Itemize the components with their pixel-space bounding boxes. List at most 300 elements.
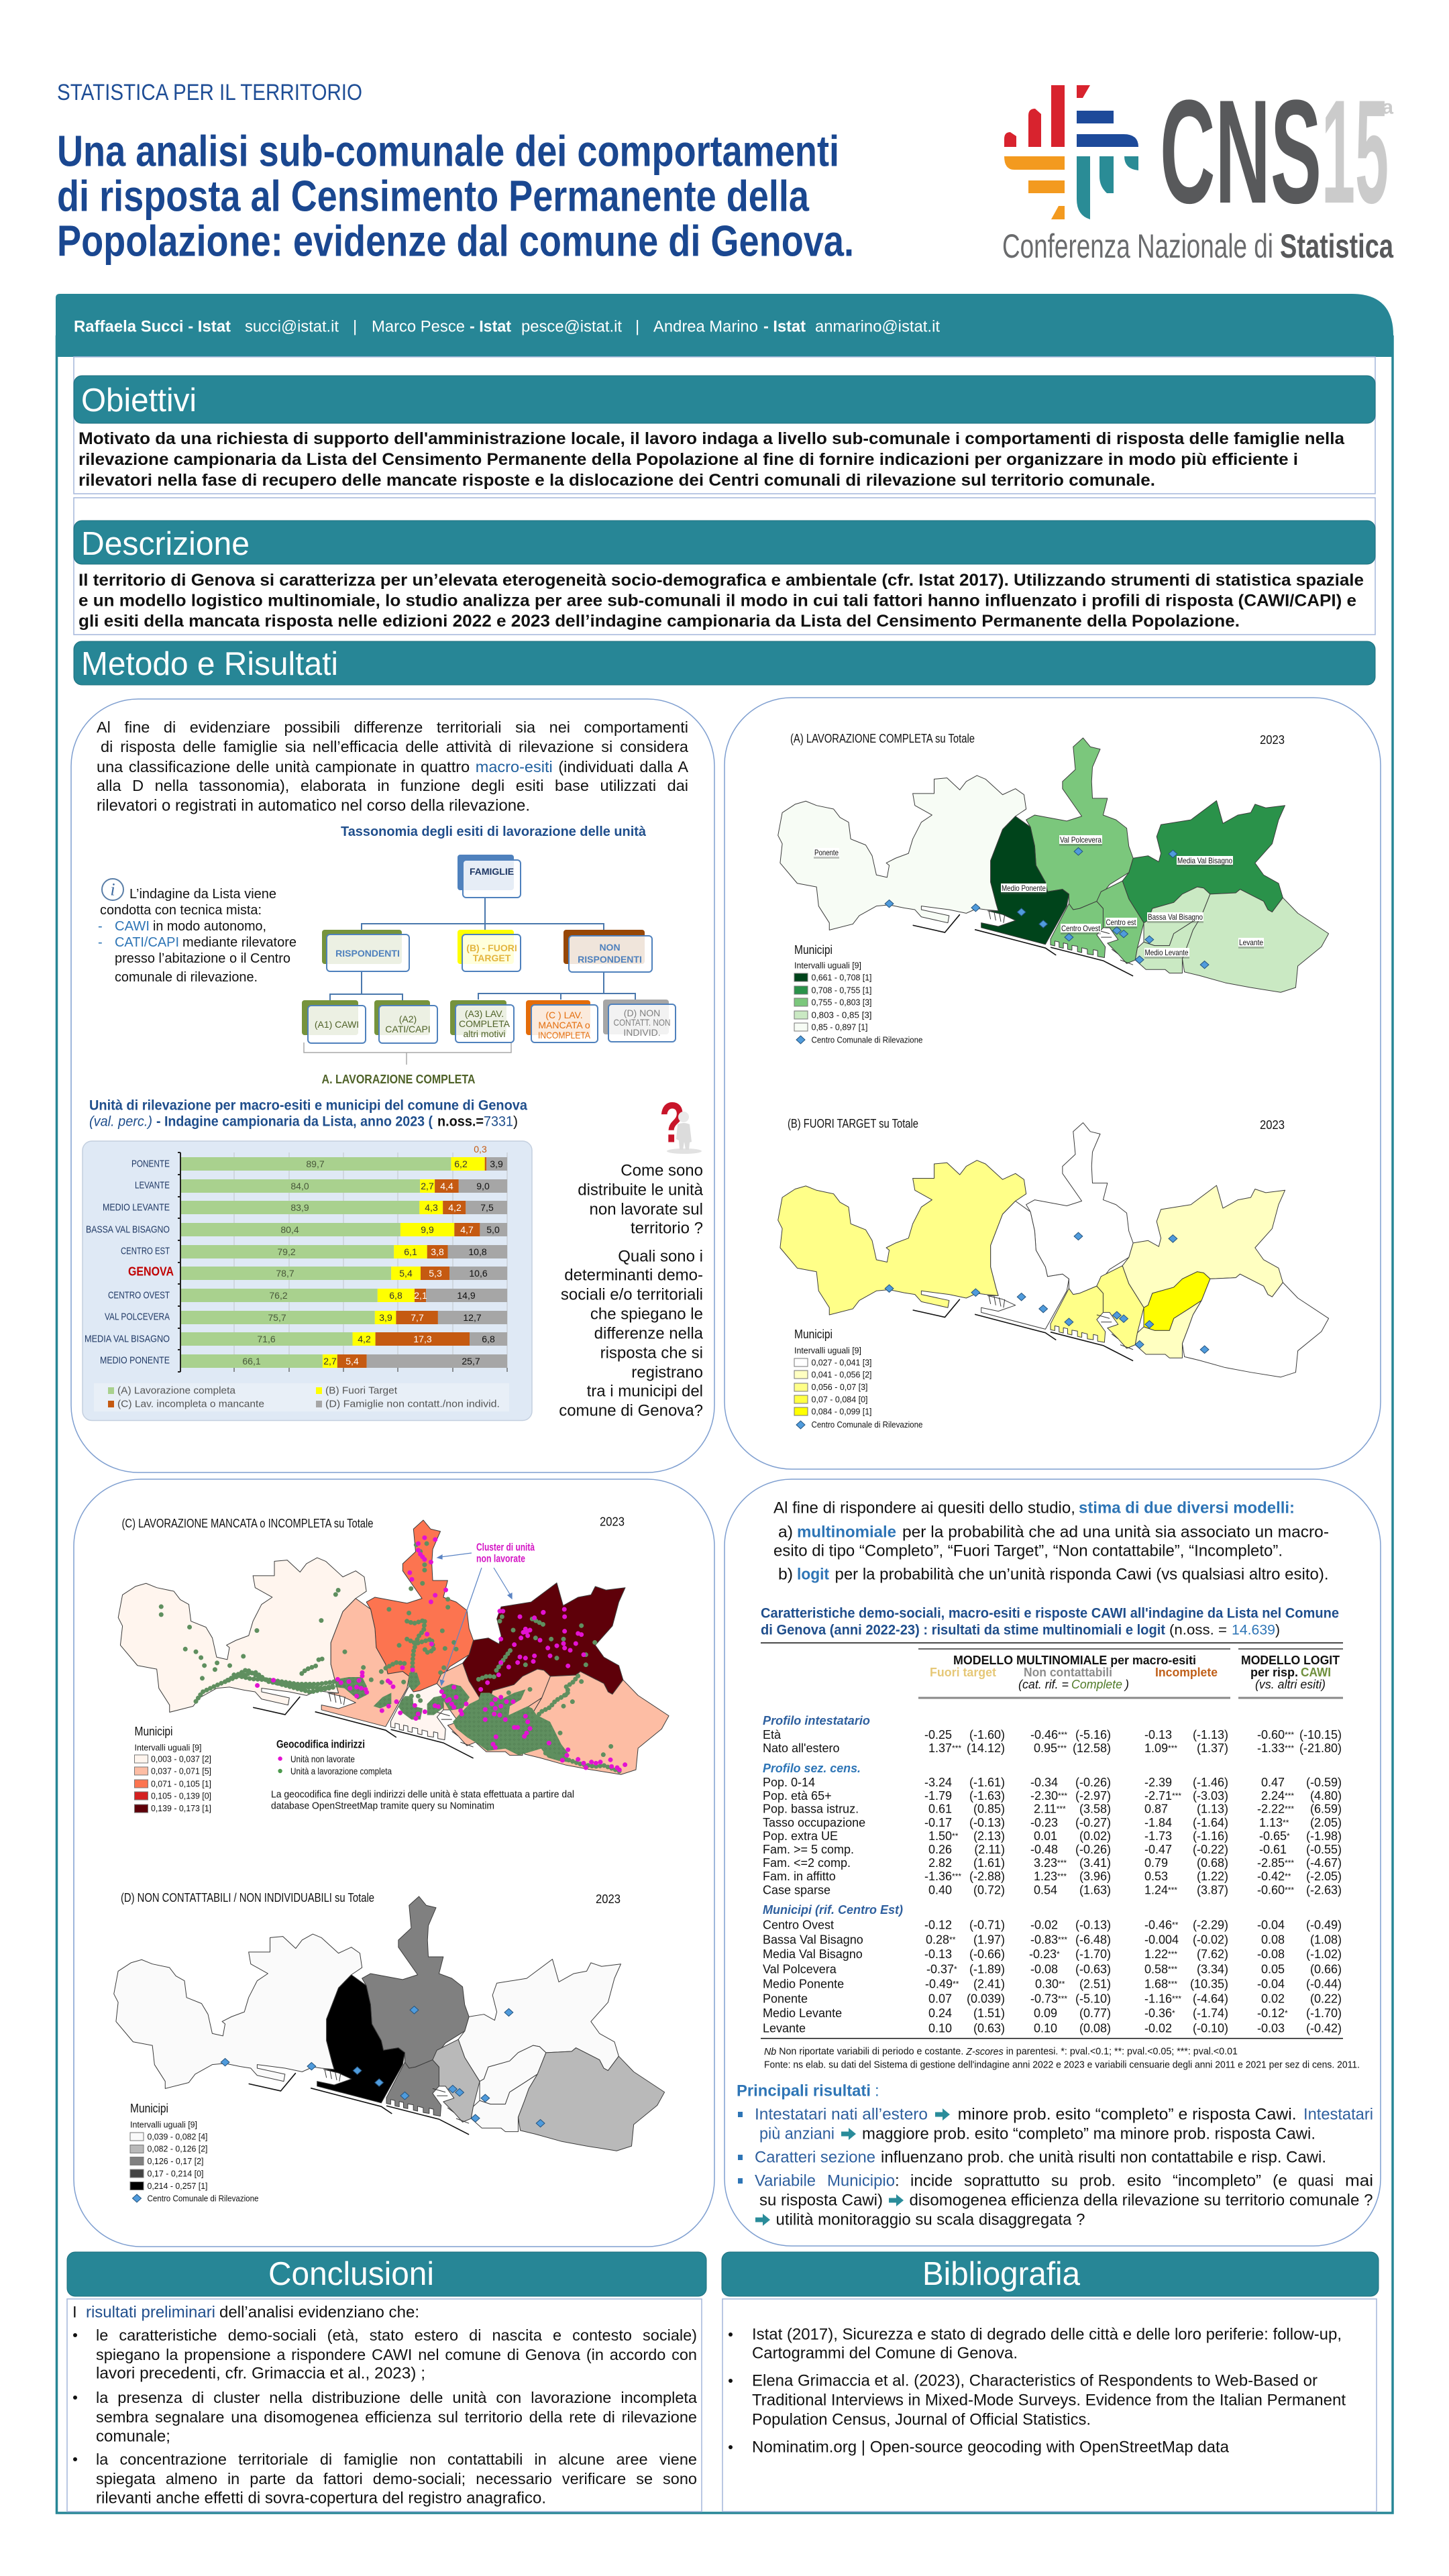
table rows: (2.51): [1079, 1978, 1111, 1991]
table rows: -0.12: [924, 1919, 952, 1932]
value labels: 4,2: [448, 1202, 462, 1213]
map B legend: [794, 1328, 923, 1430]
table rows: (-1.16): [1193, 1829, 1228, 1843]
value labels: 5,3: [429, 1268, 442, 1279]
table rows: -0.65*: [1259, 1829, 1290, 1843]
node: D: [603, 1000, 676, 1042]
category labels: VAL POLCEVERA: [105, 1311, 170, 1323]
logo: CNS 15a Conferenza Nazionale di Statistica: a: [1382, 97, 1393, 118]
value labels: 5,4: [399, 1268, 413, 1279]
category labels: BASSA VAL BISAGNO: [86, 1224, 170, 1236]
heading: tabella stime: (n.oss. =: [1169, 1622, 1227, 1638]
map D legend: 0,039 - 0,082 [4]: [148, 2132, 208, 2141]
node: C: (C ) LAV.: [545, 1010, 583, 1020]
text: modelli stimati: a): [778, 1523, 793, 1542]
table rows: (0.66): [1310, 1963, 1342, 1976]
table rows: (-5.16): [1075, 1728, 1111, 1741]
map A labels: Centro est: [1106, 918, 1136, 927]
table rows: -0.08: [1257, 1947, 1285, 1961]
table header: MODELLO MULTINOMIALE per macro-esiti: [953, 1654, 1196, 1667]
value labels: 7,5: [480, 1202, 494, 1213]
table rows: (7.62): [1197, 1947, 1228, 1961]
table rows: Centro Ovest: [763, 1919, 834, 1932]
map D legend: 0,17 - 0,214 [0]: [148, 2168, 204, 2179]
category labels: GENOVA: [128, 1265, 174, 1279]
value labels: 6,1: [404, 1246, 417, 1257]
map D legend: 0,214 - 0,257 [1]: [148, 2181, 208, 2191]
value labels: 14,9: [457, 1290, 476, 1301]
text: conclusioni: risultati preliminari: [86, 2304, 215, 2321]
table rows: -1.16***: [1144, 1992, 1181, 2006]
map A year: 2023: [1260, 733, 1285, 747]
table rows: -0.02: [1144, 2022, 1172, 2035]
table rows: 1.23***: [1034, 1870, 1067, 1883]
table rows: (-0.49): [1306, 1919, 1342, 1932]
text: introduzione metodo: rilevatori o registrati in automatico nel corso della rilevazione.: [97, 797, 530, 814]
map C legend: 0,139 - 0,173 [1]: [151, 1803, 211, 1813]
table rows: (12.58): [1073, 1741, 1111, 1755]
table rows: -0.37*: [926, 1963, 957, 1976]
table rows: 1.37***: [928, 1741, 961, 1755]
text: riferimenti: [729, 2325, 1346, 2457]
category labels: PONENTE: [131, 1158, 170, 1170]
table rows: Tasso occupazione: [763, 1816, 865, 1829]
chart legend: (C) Lav. incompleta o mancante: [117, 1398, 264, 1410]
table rows: (0.02): [1079, 1829, 1111, 1843]
map A legend: 0,708 - 0,755 [1]: [812, 985, 872, 996]
text: domande di ricerca: distribuite le unità: [578, 1181, 704, 1199]
list: principali risultati: più anziani: [759, 2125, 835, 2143]
table rows: -2.85***: [1257, 1856, 1294, 1870]
table rows: Case sparse: [763, 1884, 830, 1897]
map D year: 2023: [596, 1892, 621, 1906]
map B legend: 0,056 - 0,07 [3]: [812, 1382, 868, 1392]
map C legend: 0,037 - 0,071 [5]: [151, 1766, 211, 1776]
heading: Conclusioni: [67, 2252, 706, 2296]
callout: indagine a tecnica mista: mediante rilevatore: [182, 935, 297, 950]
table rows: (-0.66): [969, 1947, 1005, 1961]
value labels: 89,7: [306, 1159, 325, 1169]
table rows: (-1.02): [1306, 1947, 1342, 1961]
authors band: Marco Pesce: [372, 318, 465, 335]
table rows: 0.28**: [926, 1933, 956, 1947]
text: domande di ricerca: registrano: [631, 1363, 703, 1382]
table rows: -0.23: [1030, 1816, 1058, 1829]
table rows: (-0.13): [1075, 1919, 1111, 1932]
heading: Metodo e Risultati: Metodo e Risultati: [81, 646, 338, 682]
map A labels: [814, 835, 1264, 959]
text: obiettivi: [78, 429, 1345, 490]
table rows: 0.02: [1261, 1992, 1285, 2006]
table rows: -0.08: [1030, 1963, 1058, 1976]
node: rispondenti: RISPONDENTI: [335, 948, 400, 959]
node: A3: (A3) LAV.: [465, 1008, 504, 1019]
text: riferimenti: Population Census, Journal of Official Statistics.: [752, 2411, 1091, 2428]
text: domande di ricerca: Quali sono i: [618, 1248, 703, 1265]
heading: principali risultati: :: [875, 2082, 879, 2100]
text: domande di ricerca: che spiegano le: [590, 1305, 703, 1323]
table rows: -0.25: [924, 1728, 952, 1741]
table rows: (-1.89): [969, 1963, 1005, 1976]
callout: indagine a tecnica mista: in modo autonomo,: [153, 919, 266, 934]
heading: Obiettivi: Obiettivi: [81, 382, 197, 419]
heading: principali risultati: Principali risultati: [737, 2082, 871, 2100]
text: domande di ricerca: non lavorate sul: [590, 1201, 703, 1218]
map D legend: 0,126 - 0,17 [2]: [148, 2156, 204, 2166]
table rows: -0.03: [1257, 2022, 1285, 2035]
list: principali risultati: su: [1051, 2172, 1068, 2190]
table rows: Bassa Val Bisagno: [763, 1933, 863, 1947]
table header: CAWI: [1301, 1666, 1331, 1679]
table rows: -0.46**: [1144, 1919, 1179, 1932]
text: modelli stimati: esito di tipo “Completo”, “Fuori Target”, “Non contattabile”, “Incompleto”.: [773, 1542, 1283, 1560]
map A title: (A) LAVORAZIONE COMPLETA su Totale: [790, 732, 975, 745]
table rows: (1.13): [1197, 1802, 1228, 1815]
table header: Complete: [1071, 1678, 1122, 1691]
table rows: (1.37): [1197, 1741, 1228, 1755]
list: principali risultati: Municipio: [827, 2172, 895, 2190]
map C legend: 0,105 - 0,139 [0]: [151, 1791, 211, 1801]
heading: tabella stime: di Genova (anni 2022-23) : risultati da stime multinomiali e logit: [761, 1622, 1165, 1638]
value labels: 9,0: [476, 1181, 490, 1191]
authors band: - Istat: [470, 318, 511, 335]
category labels: LEVANTE: [135, 1179, 170, 1191]
chart: tassonomia: [302, 855, 676, 1086]
text: descrizione: e un modello logistico multinomiale, lo studio analizza per aree sub-comunali il modo in cui tali fattori hanno influenzato i profili di risposta (CAWI/CAPI) e: [78, 592, 1356, 610]
map A legend: Centro Comunale di Rilevazione: [812, 1034, 923, 1045]
table rows: (-0.22): [1193, 1843, 1228, 1856]
table rows: 1.68***: [1144, 1978, 1177, 1991]
text: modelli stimati: multinomiale: [797, 1523, 896, 1542]
table rows: -0.47: [1144, 1843, 1172, 1856]
table rows: (1.63): [1079, 1884, 1111, 1897]
text: modelli stimati: [773, 1499, 1329, 1583]
heading: Obiettivi: [74, 376, 1375, 423]
text: domande di ricerca: Come sono: [621, 1162, 703, 1179]
icon: arrow: [755, 2214, 770, 2226]
table rows: (-2.97): [1075, 1789, 1111, 1803]
table rows: (-1.13): [1193, 1728, 1228, 1741]
list: principali risultati: Variabile: [755, 2172, 816, 2190]
table rows: (-0.26): [1075, 1776, 1111, 1789]
map B legend: Centro Comunale di Rilevazione: [812, 1419, 923, 1430]
value labels: 12,7: [463, 1312, 482, 1323]
table rows: (-1.70): [1075, 1947, 1111, 1961]
table rows: 1.13**: [1259, 1816, 1289, 1829]
table rows: (6.59): [1310, 1802, 1342, 1815]
value labels: 4,4: [440, 1181, 453, 1191]
table rows: 1.22***: [1144, 1947, 1177, 1961]
table rows: [763, 1714, 1342, 2035]
table header: Fuori target: [930, 1666, 996, 1679]
text: conclusioni: I: [72, 2304, 77, 2321]
table rows: 0.09: [1034, 2006, 1057, 2020]
table rows: Pop. bassa istruz.: [763, 1802, 859, 1815]
text: domande di ricerca: determinanti demo-: [564, 1267, 703, 1284]
value labels: 2,7: [421, 1181, 434, 1191]
heading: tabella stime: Caratteristiche demo-sociali, macro-esiti e risposte CAWI all'indagine da Lista nel Comune: [761, 1606, 1339, 1621]
authors band: succi@istat.it: [245, 318, 339, 335]
map C legend: [134, 1725, 211, 1813]
table rows: -0.13: [1144, 1728, 1172, 1741]
node: non rispondenti: NON: [599, 942, 621, 953]
value labels: 3,9: [379, 1312, 392, 1323]
table rows: Pop. età 65+: [763, 1789, 832, 1803]
list: principali risultati: mai: [1345, 2172, 1373, 2190]
list: principali risultati: quasi: [1298, 2172, 1334, 2190]
value labels: 66,1: [242, 1356, 261, 1366]
value labels: 6,8: [389, 1290, 402, 1301]
table rows: 2.11***: [1034, 1802, 1066, 1815]
category labels: CENTRO EST: [121, 1245, 170, 1257]
value labels: [242, 1144, 503, 1366]
node: D: INDIVID.: [623, 1027, 661, 1038]
table rows: -0.73***: [1030, 1992, 1067, 2006]
table rows: -0.34: [1030, 1776, 1058, 1789]
panel: descrizione: [74, 498, 1375, 635]
table rows: 0.07: [928, 1992, 952, 2006]
text: riferimenti: Traditional Interviews in Mixed-Mode Surveys. Evidence from the Italian Permanent: [752, 2391, 1346, 2410]
list: principali risultati: su risposta Cawi): [759, 2191, 883, 2210]
chart legend: (D) Famiglie non contatt./non individ.: [325, 1398, 500, 1410]
map A labels: Media Val Bisagno: [1177, 856, 1232, 865]
list: principali risultati: [738, 2105, 1373, 2229]
heading: grafico unità per macro-esiti: n.oss.=: [437, 1114, 484, 1130]
panel: conclusioni: [67, 2252, 706, 2512]
heading: Descrizione: Descrizione: [81, 526, 250, 562]
callout: indagine a tecnica mista: CAWI: [115, 919, 150, 934]
map A labels: Medio Levante: [1144, 948, 1189, 957]
authors band: |: [353, 318, 357, 335]
authors band: Andrea Marino: [653, 318, 758, 335]
table rows: Medio Ponente: [763, 1978, 844, 1991]
table rows: (14.12): [967, 1741, 1005, 1755]
table rows: 0.54: [1034, 1884, 1057, 1897]
text: conclusioni: [72, 2304, 697, 2508]
table rows: (-0.63): [1075, 1963, 1111, 1976]
map A legend: 0,803 - 0,85 [3]: [812, 1010, 872, 1020]
map A labels: Val Polcevera: [1060, 835, 1102, 845]
table rows: (1.22): [1197, 1870, 1228, 1883]
map A legend: 0,755 - 0,803 [3]: [812, 997, 872, 1008]
table rows: 0.26: [928, 1843, 952, 1856]
list: principali risultati: utilità monitoraggio su scala disaggregata ?: [775, 2211, 1085, 2229]
table rows: (-1.60): [969, 1728, 1005, 1741]
table rows: Profilo intestatario: [763, 1714, 870, 1727]
table rows: Pop. 0-14: [763, 1776, 815, 1789]
text: modelli stimati: stima di due diversi modelli:: [1079, 1499, 1295, 1517]
table rows: (0.63): [973, 2022, 1005, 2035]
table rows: Nato all'estero: [763, 1741, 840, 1755]
geocoding legend: Geocodifica indirizzi: [276, 1737, 365, 1751]
table rows: (-1.64): [1193, 1816, 1228, 1829]
heading: grafico unità per macro-esiti: 7331: [484, 1114, 513, 1130]
table rows: -0.60***: [1257, 1884, 1294, 1897]
table rows: (-0.26): [1075, 1843, 1111, 1856]
value labels: 75,7: [268, 1312, 286, 1323]
text: riferimenti: Cartogrammi del Comune di Genova.: [752, 2344, 1018, 2363]
table rows: (-0.27): [1075, 1816, 1111, 1829]
heading: Bibliografia: [722, 2252, 1379, 2296]
map B title: (B) FUORI TARGET su Totale: [788, 1117, 918, 1130]
table header: ): [1124, 1678, 1129, 1691]
panel: metodo, tassonomia e grafico: [67, 698, 1381, 2512]
node: C: [526, 1000, 598, 1042]
table rows: Profilo sez. cens.: [763, 1762, 861, 1775]
table rows: 0.87: [1144, 1802, 1168, 1815]
value labels: 2,1: [414, 1290, 427, 1301]
table rows: 0.58***: [1144, 1963, 1177, 1976]
table rows: -0.36*: [1144, 2006, 1175, 2020]
table rows: (-6.48): [1075, 1933, 1111, 1947]
map D legend: [130, 2102, 259, 2203]
text: introduzione metodo: [97, 718, 688, 814]
table rows: -0.60***: [1257, 1728, 1294, 1741]
label: lavorazione completa: A. LAVORAZIONE COMPLETA: [322, 1073, 475, 1086]
table rows: 1.09***: [1144, 1741, 1177, 1755]
map A: lavorazione completa: [778, 738, 1329, 992]
table rows: -3.24: [924, 1776, 952, 1789]
table rows: (0.039): [967, 1992, 1005, 2006]
callout: cluster di unità non lavorate: non lavorate: [476, 1554, 525, 1564]
table rows: (2.11): [974, 1843, 1005, 1856]
map A legend: 0,85 - 0,897 [1]: [812, 1022, 868, 1032]
text: modelli stimati: per la probabilità che un’unità risponda Cawi (vs qualsiasi altro esito).: [835, 1566, 1328, 1583]
heading: tabella stime: 14.639: [1232, 1622, 1275, 1638]
map D legend: 0,082 - 0,126 [2]: [148, 2144, 208, 2153]
table rows: 0.05: [1261, 1963, 1285, 1976]
table rows: (3.58): [1079, 1802, 1111, 1815]
callout: indagine a tecnica mista: [98, 879, 297, 985]
node: A2: [374, 1000, 437, 1043]
table rows: (-0.55): [1306, 1843, 1342, 1856]
text: riferimenti: Nominatim.org | Open-source geocoding with OpenStreetMap data: [752, 2438, 1230, 2457]
list: principali risultati: maggiore prob. esito “completo” ma minore prob. risposta Cawi.: [862, 2125, 1316, 2143]
panel: obiettivi: [74, 357, 1375, 494]
list: principali risultati: Caratteri sezione: [755, 2148, 875, 2167]
table rows: -0.04: [1257, 1919, 1285, 1932]
panel: mappe A e B: [724, 698, 1381, 1469]
table rows: -0.13: [924, 1947, 952, 1961]
table rows: (10.35): [1190, 1978, 1228, 1991]
table rows: -1.73: [1144, 1829, 1172, 1843]
value labels: 76,2: [269, 1290, 288, 1301]
text: descrizione: gli esiti della mancata risposta nelle edizioni 2022 e 2023 dell’indagine campionaria da Lista del Censimento Permanente della Popolazione.: [78, 612, 1240, 631]
map C: geocoded dots east cluster: [335, 1611, 625, 1772]
table rows: -2.39: [1144, 1776, 1172, 1789]
table rows: 0.47: [1261, 1776, 1285, 1789]
map C: geocoded dots west and north: [161, 1538, 564, 1701]
note: geocodifica: database OpenStreetMap tramite query su Nominatim: [271, 1801, 494, 1811]
bars: [180, 1157, 507, 1368]
panel: modelli e risultati: [724, 1479, 1381, 2246]
table rows: (-1.74): [1193, 2006, 1228, 2020]
table rows: (-10.15): [1299, 1728, 1342, 1741]
title: di risposta al Censimento Permanente della: [57, 172, 810, 220]
map A legend: Municipi: [794, 943, 833, 957]
table rows: (-1.98): [1306, 1829, 1342, 1843]
icon: arrow: [841, 2128, 856, 2140]
title: [57, 126, 854, 266]
list: principali risultati: esito: [1127, 2172, 1161, 2190]
text: descrizione: [78, 571, 1364, 631]
map B legend: 0,07 - 0,084 [0]: [812, 1394, 868, 1405]
table rows: 0.95***: [1034, 1741, 1067, 1755]
table rows: Medio Levante: [763, 2006, 842, 2020]
table rows: (0.85): [973, 1802, 1005, 1815]
table rows: 0.61: [928, 1802, 952, 1815]
map C legend: Municipi: [134, 1725, 173, 1738]
authors band: - Istat: [763, 318, 806, 335]
table rows: (-2.05): [1306, 1870, 1342, 1883]
list: principali risultati: incide: [910, 2172, 953, 2190]
table rows: 0.30**: [1035, 1978, 1065, 1991]
heading: grafico unità per macro-esiti: - Indagine campionaria da Lista, anno 2023 (: [156, 1114, 433, 1130]
table rows: 0.08: [1261, 1933, 1285, 1947]
table rows: -2.71***: [1144, 1789, 1181, 1803]
map A labels: Ponente: [814, 848, 839, 857]
callout: cluster di unità non lavorate: Cluster di unità: [476, 1542, 535, 1554]
text: domande di ricerca: differenze nella: [594, 1324, 704, 1343]
map C: lavorazione mancata: [118, 1520, 669, 1774]
geocoding legend: Unità a lavorazione completa: [290, 1766, 392, 1776]
table rows: -1.79: [924, 1789, 952, 1803]
map A labels: Levante: [1239, 938, 1263, 947]
table rows: (-4.67): [1306, 1856, 1342, 1870]
poster frame: [56, 335, 1393, 2513]
authors band: |: [635, 318, 639, 335]
text: domande di ricerca: [559, 1162, 704, 1419]
value labels: 3,9: [490, 1159, 503, 1169]
table rows: (1.08): [1310, 1933, 1342, 1947]
map D legend: Municipi: [130, 2102, 168, 2115]
table rows: (3.41): [1079, 1856, 1111, 1870]
table rows: (2.13): [973, 1829, 1005, 1843]
table rows: (0.08): [1079, 2022, 1111, 2035]
text: conclusioni: spiegano la propensione a rispondere CAWI nel comune di Genova (in accordo con: [96, 2345, 697, 2363]
chart legend: (A) Lavorazione completa: [117, 1385, 236, 1397]
table rows: 1.24***: [1144, 1884, 1177, 1897]
table rows: (2.41): [973, 1978, 1005, 1991]
node: A1: (A1) CAWI: [315, 1019, 359, 1030]
table rows: (-1.46): [1193, 1776, 1228, 1789]
node: C: INCOMPLETA: [538, 1030, 591, 1040]
list: principali risultati: :: [895, 2172, 900, 2190]
table rows: -0.004: [1144, 1933, 1179, 1947]
value labels: 25,7: [462, 1356, 480, 1366]
text: conclusioni: comunale;: [96, 2427, 170, 2446]
title: Una analisi sub-comunale dei comportamenti: [57, 126, 839, 176]
value labels: 9,9: [421, 1224, 434, 1235]
heading: Bibliografia: Bibliografia: [922, 2256, 1081, 2292]
node: A2: (A2): [399, 1014, 417, 1024]
note: geocodifica: La geocodifica fine degli indirizzi delle unità è stata effettuata a partire dal: [271, 1788, 574, 1801]
section label: STATISTICA PER IL TERRITORIO: [57, 80, 362, 105]
value labels: 10,8: [468, 1246, 487, 1257]
table rows: (0.77): [1079, 2006, 1111, 2020]
list: principali risultati: prob.: [1079, 2172, 1116, 2190]
text: modelli stimati: b): [778, 1566, 793, 1583]
table rows: Fam. in affitto: [763, 1870, 836, 1883]
table rows: -0.12*: [1257, 2006, 1288, 2020]
table note: Fonte: ns elab. su dati del Sistema di gestione dell'indagine anni 2022 e 2023 e variabili censuarie degli anni 2011 e 2021 per sez di cens. 2011.: [764, 2059, 1360, 2070]
value labels: 79,2: [277, 1246, 296, 1257]
value labels: 3,8: [431, 1246, 444, 1257]
callout: indagine a tecnica mista: CATI/CAPI: [115, 935, 179, 950]
node: A3: COMPLETA: [459, 1018, 511, 1029]
table header: (vs. altri esiti): [1255, 1678, 1326, 1691]
value labels: 4,3: [425, 1202, 438, 1213]
